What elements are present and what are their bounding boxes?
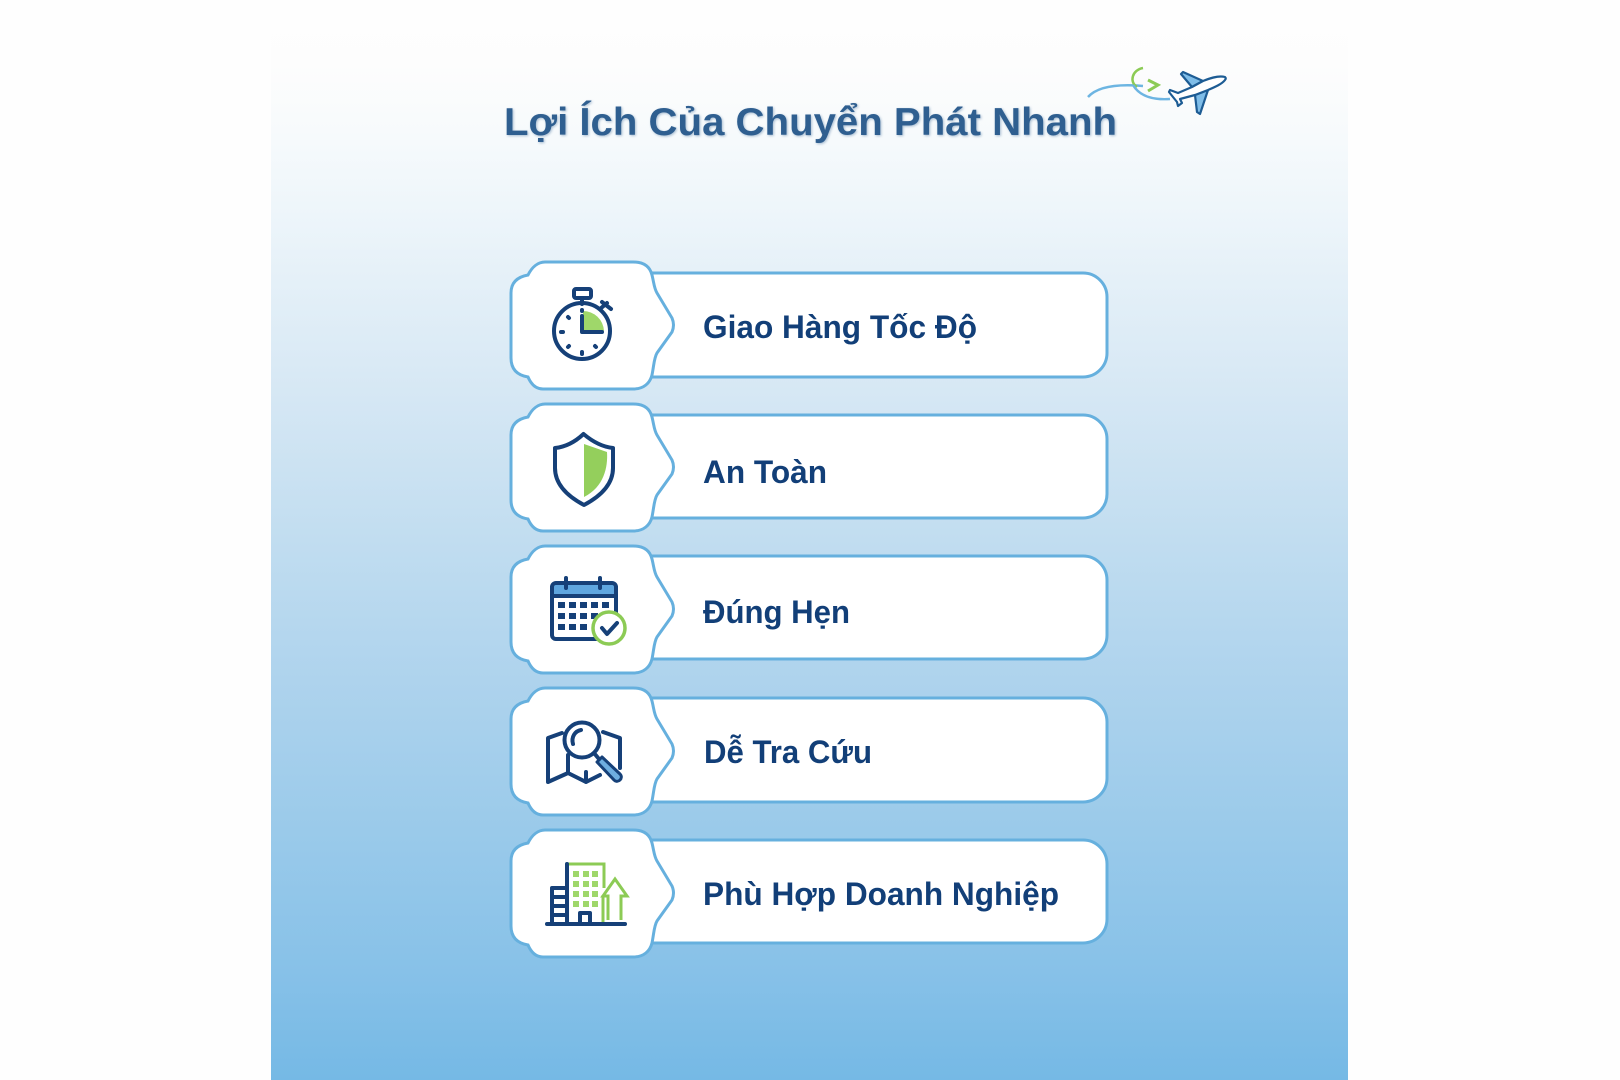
background panel — [271, 0, 1348, 1080]
row bar — [600, 840, 1107, 943]
card: Phù Hợp Doanh Nghiệp — [511, 830, 1107, 957]
label: Giao Hàng Tốc Độ — [703, 309, 977, 345]
badge — [511, 262, 674, 389]
row bar — [600, 556, 1107, 659]
badge — [511, 688, 674, 815]
icon: airplane with swoosh — [1088, 68, 1226, 114]
badge — [511, 830, 674, 957]
title: Lợi Ích Của Chuyển Phát Nhanh — [504, 100, 1117, 144]
row bar — [600, 415, 1107, 518]
icon: stopwatch — [554, 289, 611, 359]
badge — [511, 404, 674, 531]
badge — [511, 546, 674, 673]
label: Dễ Tra Cứu — [704, 734, 872, 770]
icon: map with magnifier — [548, 722, 621, 782]
card: An Toàn — [511, 404, 1107, 531]
card: Dễ Tra Cứu — [511, 688, 1107, 815]
title: Lợi Ích Của Chuyển Phát Nhanh — [505, 101, 1118, 145]
icon: buildings with growth arrow — [547, 864, 627, 924]
card: Giao Hàng Tốc Độ — [511, 262, 1107, 389]
card: Đúng Hẹn — [511, 546, 1107, 673]
label: Phù Hợp Doanh Nghiệp — [703, 876, 1059, 912]
label: Đúng Hẹn — [703, 594, 850, 630]
label: An Toàn — [703, 454, 827, 490]
row bar — [600, 698, 1107, 802]
icon: shield — [555, 434, 613, 505]
icon: calendar with check — [552, 578, 625, 644]
row bar — [600, 273, 1107, 377]
